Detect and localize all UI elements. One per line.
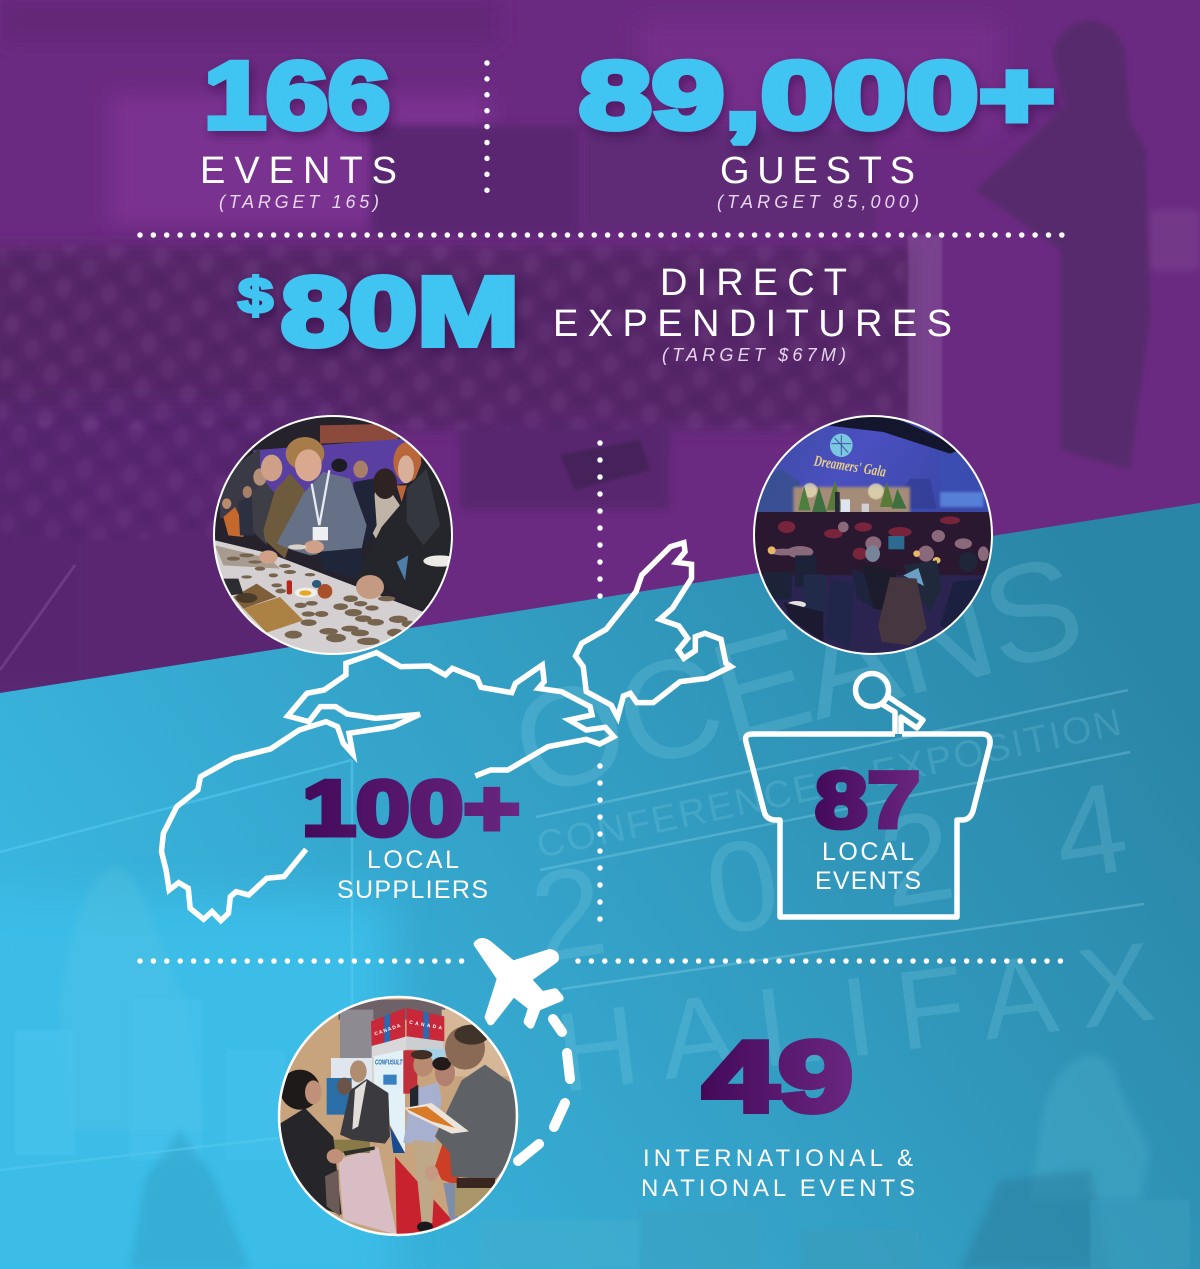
stat: 166 events: EVENTS (200, 150, 397, 192)
ghost signage text: HALIFAX (550, 919, 1160, 1116)
photo: trade show booth (275, 993, 521, 1239)
stat: 100+ local suppliers: 100+ (302, 764, 520, 852)
stat: 100+ local suppliers: SUPPLIERS (337, 876, 488, 904)
photo: gala dinner (750, 412, 996, 658)
stat: 100+ local suppliers (302, 764, 520, 904)
stat: 49 international and national events: INTERNATIONAL & (643, 1145, 913, 1172)
icon: podium with microphone (746, 674, 990, 917)
divider: lower horizontal dots (140, 958, 1062, 964)
stat: 49 international and national events: 49 (703, 1021, 853, 1133)
stat: 49 international and national events: NATIONAL EVENTS (641, 1175, 915, 1202)
stat: 89,000+ guests: GUESTS (720, 150, 915, 192)
stat: 166 events: 166 (204, 43, 390, 149)
stat: 166 events (200, 43, 397, 212)
stat: 89,000+ guests: (TARGET 85,000) (717, 192, 919, 212)
icon: airplane with dashed flight path (477, 942, 570, 1161)
photo: trade show booth: CONFUSULT (375, 1058, 403, 1067)
photo: gala dinner: Dreamers' Gala (812, 452, 887, 481)
stat: 87 local events: 87 (815, 755, 920, 844)
stat: 89,000+ guests: 89,000+ (579, 43, 1055, 149)
stat: 49 international and national events (641, 1021, 915, 1202)
stat: $80M direct expenditures: EXPENDITURES (553, 303, 952, 345)
photo: trade show booth: CANADA (374, 1023, 402, 1038)
ghost signage text (522, 562, 1155, 1091)
stat: $80M direct expenditures (238, 257, 952, 366)
photo: oyster buffet (210, 412, 457, 658)
stat: 166 events: (TARGET 165) (219, 192, 379, 212)
stat: 87 local events (815, 755, 921, 895)
stat: 87 local events: EVENTS (815, 867, 921, 895)
crowd texture (0, 245, 905, 430)
ghost panel speakers and sofas (15, 868, 1190, 1269)
ghost signage text: 2 0 2 4 (522, 756, 1137, 991)
ghost signage text: CONFERENCE & EXPOSITION (533, 702, 1125, 867)
divider: top vertical dots (484, 63, 490, 206)
background: teal conference photo with ghost signage (0, 490, 1200, 1269)
icon: Nova Scotia map outline (161, 543, 731, 921)
stat: $80M direct expenditures: DIRECT (660, 262, 847, 304)
stat: 100+ local suppliers: LOCAL (367, 846, 459, 874)
stat: $80M direct expenditures: (TARGET $67M) (662, 345, 846, 365)
ghost signage text: OCEANS (497, 524, 1098, 826)
divider: upper horizontal dots (140, 232, 1062, 238)
divider: centre vertical dots (597, 443, 603, 920)
stat: 87 local events: LOCAL (822, 838, 914, 866)
speaker silhouette (975, 20, 1150, 470)
background: purple conference photo (0, 0, 1200, 700)
stat: $80M direct expenditures: $ (238, 268, 273, 324)
stat: $80M direct expenditures: 80M (281, 257, 519, 366)
photo: trade show booth: CANADA (409, 1020, 443, 1031)
stat: 89,000+ guests (579, 43, 1055, 212)
